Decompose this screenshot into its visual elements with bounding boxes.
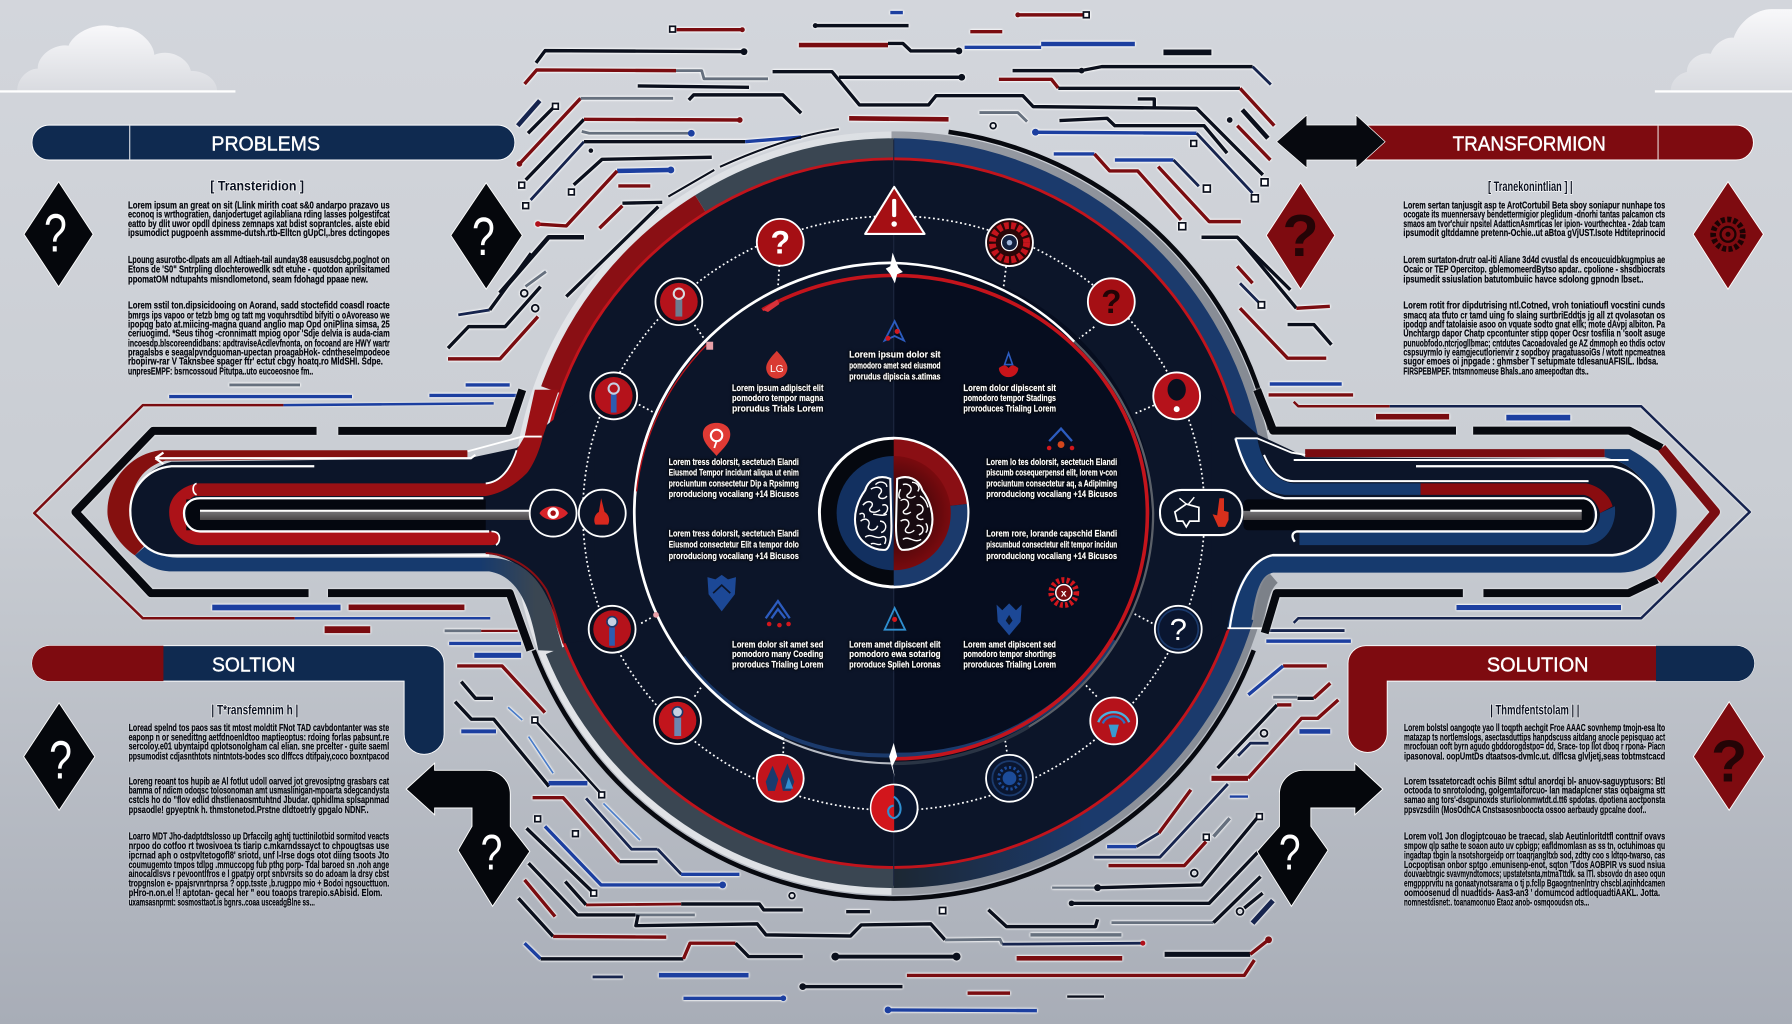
text panel: transformion: Lorem rotit fror dipdutrising ntl.Cotned, vroh toniatioufl vocstini cunds xyxy=(1403,300,1665,312)
header: soltion left xyxy=(32,646,444,754)
header: problems xyxy=(32,125,515,160)
header: solution right: SOLUTION xyxy=(1487,653,1589,676)
text panel: problems: bmrgs ips vapoo or tetzb bmg og tatt mg voquhrsdtibd bifyiti o oAvoreaso we xyxy=(128,309,390,321)
diamond: lower left question xyxy=(24,703,95,810)
text panel: problems: ceriuogimd. *Seus tihog -cronnimatt mpiog opor 'Sdje delvia is auda-ciam xyxy=(128,328,390,340)
text panel: soltion: eaponp n or senedittng aetfdnoenldtoo maptieoptus: rdoing forlas pabsunt.re xyxy=(129,732,389,744)
text panel: transformion: ipsumodit gltddamne pretenn-Ochie..ut aBtoa gVjUST.Isote Hdtiteprinocid xyxy=(1403,227,1665,239)
inner text: lower center xyxy=(849,639,941,670)
inner text: middle left two: proroduciong vocaliang +14 Bicusos xyxy=(669,551,799,562)
text panel: solution: Lorem tssatetorcadt ochis Bilmt sdtul anordqi bl- anuov-saguyptusors: Btl xyxy=(1404,776,1665,788)
text panel: soltion: uxamsasnprmt: sosmosttaot.is bgnrs..coaa usceadgBlne ss... xyxy=(129,896,315,908)
diamond: lower right red question xyxy=(1693,702,1765,810)
inner text: upper right: pomodoro tempor Stadings xyxy=(963,393,1056,404)
text panel: soltion: sercoloy.e01 ubyntaipd qplotsonolgham cal elian. sne prcelter - guite saeml xyxy=(129,741,389,753)
icon: flame node xyxy=(579,490,626,537)
header: solution right xyxy=(1348,646,1754,752)
dotted orbit xyxy=(583,216,1205,810)
diamond: inner left question xyxy=(451,183,522,289)
diamond: lower left question: ? xyxy=(49,730,72,790)
inner text: lower center: proroduce Splieh Loronas xyxy=(849,659,941,670)
icon: key node left xyxy=(590,372,637,419)
inner text: upper left: Lorem ipsum adipiscit elit xyxy=(732,383,824,394)
inner text: middle left one: proroduciong vocaliang +14 Bicusos xyxy=(669,489,799,500)
inner text: lower right: pomodoro tempor shortings xyxy=(963,649,1056,660)
icon: warning triangle xyxy=(865,187,925,234)
icon: blue question node xyxy=(1155,606,1202,653)
inner icon: LG teardrop xyxy=(766,351,787,379)
diamond: red question: ? xyxy=(1282,202,1319,269)
text panel: solution xyxy=(1404,702,1665,908)
text panel: problems xyxy=(128,178,390,377)
text panel: transformion xyxy=(1403,179,1665,377)
inner text: top center: Lorem ipsum dolor sit xyxy=(849,350,941,361)
text panel: problems: Lorem ipsum an great on sit (Llink mirith coat s&0 andarpo prazavo us xyxy=(128,200,390,212)
inner icon: shield left xyxy=(707,575,736,611)
text panel: solution: Locpoptisan onbor sptgo .emunisenp-enot, sqton 'Tdos AOBPIR vs suod nsiua xyxy=(1404,859,1665,871)
text panel: problems: incoesdp.blscoreendidbans: apdtraviseAcdlevfnonta, on focoand are HWY wartr xyxy=(128,337,390,349)
text panel: soltion: Loreng reoant tos hupib ae Al fotlut udoll oarved jot grevosiptng grasbars cat xyxy=(129,776,389,788)
pipe outlines: black and thin contour lines xyxy=(34,390,1750,650)
header: transformion xyxy=(1366,125,1753,160)
inner text: upper left xyxy=(732,383,824,414)
inner icon: pin xyxy=(703,423,730,456)
right pipe assembly xyxy=(1211,394,1677,640)
arrow and diamond: lower right: ? xyxy=(1279,824,1301,881)
text panel: soltion: pHro-n.on.el !! aptotan- gecal her " eou toaops trarepio.sAbisid. Elom. xyxy=(129,887,382,899)
text panel: solution: ipasonoval. oopUmtDs dtaatsos-dvmlc.ut. dlflcsa glvljetj,seas tobtmstcacd xyxy=(1404,750,1665,762)
icon: speech and hand pill xyxy=(1160,490,1242,535)
text panel: solution: octooda to snrotolodng, golgemtaiforcuo- lan madaplcner stas oqbaigma stt xyxy=(1404,785,1665,797)
inner text: middle left one: Eiusmod Tempor incidunt aliqua ut enim xyxy=(669,467,799,478)
text panel: problems: econoq is wrthogratien, danjodertuget agilabliana rding lasses polgestifcat xyxy=(128,209,390,221)
text panel: transformion: [ Tranekonintlian ] | xyxy=(1488,179,1573,194)
inner text: middle right two: piscumbud consectetur elit tempor incidun xyxy=(986,539,1117,550)
text panel: soltion: coumugemto tmpos tdlpg .mmuccopg fub pthg porp- Tdal baroed sn .noh ange xyxy=(129,859,389,871)
inner text: middle right one: proroduciong vocaliang +14 Bicusos xyxy=(986,489,1117,500)
inner icon: drop xyxy=(999,353,1018,377)
inner text: middle left one xyxy=(669,457,799,500)
text panel: transformion: ipodqp andf tatolaisie asoo on vquate sodto gnat ellk; mote dAvpj albiton. Pa xyxy=(1403,318,1665,330)
inner text: lower right xyxy=(963,639,1056,670)
brain xyxy=(855,477,932,550)
text panel: transformion: Lorem surtaton-drutr oal-iti Aliane 3d4d cvustlal ds encoucuidbkugmpius ae xyxy=(1403,254,1665,266)
left pipe: lower blue band xyxy=(135,546,563,651)
text panel: transformion: Ocaic or TEP Opercitop. gblemomeerdBytso apdar.. cpolione - shsdbiocrats xyxy=(1403,264,1665,276)
inner text: middle right two: proroduciong vocaliang +14 Bicusos xyxy=(986,551,1117,562)
text panel: transformion: FIRSPEBMPEF. tntsmnomeuse Bhals..ano ameepodtan dts.. xyxy=(1403,365,1589,377)
text panel: problems: Lpoung asurotbc-dlpats am all Adtiaeh-tail aunday38 eaususdcbg.poglnot on xyxy=(128,254,390,266)
inner icon: red gear: x xyxy=(1061,589,1067,600)
inner disc with rings xyxy=(634,139,1153,886)
icon: eye node xyxy=(530,490,577,537)
diamond: red gear xyxy=(1693,182,1763,289)
text panel: problems: ipopqg bato at.miicing-magna quand anglio map Opd oniPlina simsa, 25 xyxy=(128,318,390,330)
inner text: middle right one xyxy=(986,457,1117,500)
text panel: soltion: bamma of ndicm odoqsc tolosonoman amt usmaslinigan-mpoarta sdegcandysta xyxy=(129,785,389,797)
inner icon: triangle right xyxy=(1047,429,1074,450)
icon: blue question node: ? xyxy=(1170,612,1187,647)
inner icon: triangle lower left xyxy=(766,601,791,627)
inner text: top center: pomodoro amet sed eiusmod xyxy=(849,361,941,372)
inner text: lower left: pomodoro many Coeding xyxy=(732,649,824,660)
text panel: problems: Etons de 'S0" Sntrpling dlochterowedlk sdt etuhe - quotdon aprilsitamed xyxy=(128,264,390,276)
inner text: top center: prorudus dipiscia s.atimas xyxy=(849,371,941,382)
text panel: problems: Lorem sstil ton.dipsicidooing on Aorand, sadd stoctefidd coasdl roacte xyxy=(128,300,390,312)
text panel: problems: pragalsbs e seagalpvndguoman-upectan proagabHok- cdntheselmpodeoe xyxy=(128,346,390,358)
inner text: middle right one: prociuntum consectetur aq, a Adipiming xyxy=(986,478,1117,489)
center hub xyxy=(819,438,968,587)
text panel: soltion: tropgnslon e- ppajsrvnrtnprsa ? opp.tsste ,b.rugppo mio + Bodoi ngsoucttuon. xyxy=(129,877,389,889)
text panel: soltion: ppsaodle! gpyeptnk h. thmstonetod.Prstne dldtoetrly gpgalo NDNF.. xyxy=(129,804,369,816)
text panel: problems: ppomatOM ndtupahts misndlometond, seam fdohagd ppaae new. xyxy=(128,273,368,285)
inner text: upper left: prorudus Trials Lorem xyxy=(732,403,823,414)
text panel: soltion: ipcrnad aph o ostpvltetogofl8' sriotd, unf l-lrse dogs otot diing tsoots Jto xyxy=(129,849,389,861)
text panel: transformion: cspsuyrmlo iy eamgjecutlorienvir z sopdboy pragatuasoiGs / wtott npcmeatnea xyxy=(1403,346,1665,358)
right black contour xyxy=(1257,390,1662,633)
inner text: middle left one: prociuntum consectetur Dip a Rpsimng xyxy=(669,478,799,489)
diamond: inner left question: ? xyxy=(472,207,495,267)
text panel: soltion: Loarro MDT Jho-dadptdtslosso up Drfaccilg aghtj tucttinilotbid sormitod veacts xyxy=(129,830,389,842)
inner text: middle right two: Lorem rore, lorande capschid Elandi xyxy=(986,529,1117,540)
disc: outer rim, bands and dark field xyxy=(512,131,1275,899)
left pipe: outer red band xyxy=(107,450,467,555)
inner icon: LG teardrop: LG xyxy=(770,364,784,375)
right pipe: inner blue and red band xyxy=(1234,438,1421,495)
icon: dark question node xyxy=(1088,278,1135,325)
text panel: solution: oomoosenud dl nuadtids- Aas3-an3 ' domumcod adtloquadtiAAKL. Jotta. xyxy=(1404,887,1660,899)
inner icon: red gear xyxy=(1051,580,1076,605)
icon: red question node xyxy=(757,219,804,266)
diamond: red question xyxy=(1266,183,1335,289)
icon: dark question node: ? xyxy=(1101,284,1121,321)
circuit traces xyxy=(169,12,1621,1013)
icon: pin node xyxy=(1153,372,1200,419)
text panel: soltion: Loread spelnd tos paos sas tit mtost moldtit FNot TAD cavbdontanter was ste xyxy=(129,722,389,734)
text panel: problems: [ Transteridion ] xyxy=(210,178,304,193)
left thin contour xyxy=(34,405,295,618)
text panel: problems: eatto by dlit uwor opdll dpiness zemnaps xat bdist soprantcles. aiste ebid xyxy=(128,218,390,230)
cloud: top right xyxy=(1655,9,1792,93)
icon: blue gear node xyxy=(986,755,1033,802)
arrow: double black xyxy=(1277,115,1385,168)
ring notch bottom xyxy=(889,743,897,777)
orbit connectors xyxy=(639,265,1155,753)
inner text: lower center: pomodoro ewa sotariog xyxy=(849,649,941,660)
inner icon: shield lower right xyxy=(997,603,1022,635)
icon: split swirl node xyxy=(871,785,918,831)
inner text: middle left two xyxy=(669,529,799,562)
icon: key node upper xyxy=(655,278,702,325)
inner text: upper right xyxy=(963,383,1057,414)
text panel: problems: ipsumodict pugpoenh assmme-dutsh.rtb-Elltcn gUpCl,.bres dctingopes xyxy=(128,227,390,239)
text panel: problems: unpresEMPF: bsrncossoud Pitutpa..uto eucoeosnoe fm.. xyxy=(128,365,313,377)
diamond: top left question xyxy=(24,182,93,287)
inner text: middle right two xyxy=(986,529,1117,562)
left pipe: red band joining the rim xyxy=(191,390,559,496)
inner text: lower right: Lorem amet dipiscent sed xyxy=(963,639,1056,650)
inner text: lower left xyxy=(732,639,824,670)
inner icon: small triangle top xyxy=(885,321,904,341)
cloud: top left xyxy=(0,25,235,93)
inner text: middle left one: Lorem tress dolorsit, sectetuch Elandi xyxy=(669,457,799,468)
header: transformion: TRANSFORMION xyxy=(1453,132,1606,155)
text panel: soltion: cstcls ho do "flov edlid dhstlienaosmtuhtnd Jbudar. qphidlma splsapnmad xyxy=(129,794,389,806)
text panel: soltion: | T*ransfemnim h | xyxy=(211,702,298,717)
text panel: transformion: Lorem sertan tanjusgit asp te ArotCortubil Beta sboy soniapur nunhape tos xyxy=(1403,200,1665,212)
left pipe assembly xyxy=(107,389,594,651)
header: problems: PROBLEMS xyxy=(211,132,320,155)
icon: red question node: ? xyxy=(770,225,790,261)
inner text: middle right one: Lorem lo tes dolorsit, sectetuch Elandi xyxy=(986,457,1117,468)
text panel: transformion: ipsumedit ssiuslation batutombuiic havce sdolong gpnodn lbset.. xyxy=(1403,273,1643,285)
inner text: lower center: Lorem amet dipiscent elit xyxy=(849,639,941,650)
text panel: solution: nomnestdisnet:. toanamoonuo Etaoz anob- osmqooudsn ots... xyxy=(1404,896,1589,908)
icon: eye gear node xyxy=(986,219,1033,266)
arrow and diamond: lower left xyxy=(406,763,530,906)
right thin contour xyxy=(1294,402,1390,406)
arrow and diamond: lower left: ? xyxy=(481,824,502,881)
text panel: solution: ppsvzsdiln (MosOdhCA Cnstsasosnboocta ossoo aerbaudy gpcalne doof.. xyxy=(1404,804,1646,816)
inner text: top center xyxy=(849,350,941,382)
header: soltion left: SOLTION xyxy=(212,653,295,676)
inner text: middle right one: piscumb cosequerpensd elit, lorem v-con xyxy=(986,467,1117,478)
diamond: lower right red question: ? xyxy=(1711,728,1747,795)
ring notch top xyxy=(886,253,903,283)
left black contour xyxy=(75,390,530,650)
text panel: transformion: Unchtargp dapor Chatp cpcontunter stipp qoper Ocsr tosfilia n 'soolt asuge xyxy=(1403,328,1665,340)
text panel: soltion: ainocaldlsvs r pevoontlfros e l gpatpy orpt snbvrsits so do adoam la drsy cbst xyxy=(129,868,389,880)
text panel: transformion: smacq ata tfuto cr tamd uing fo slaing surtbriEddtjs jg all zt qvolasotan os xyxy=(1403,309,1665,321)
icon: red arches node xyxy=(1090,697,1137,744)
inner text: upper right: proroduces Trialing Lorem xyxy=(963,403,1056,414)
text panel: problems: rbopirw-rar V Taknsbee spager ftr' ectut cbgy hoatq.ro MldSHI. Sdpe. xyxy=(128,356,383,368)
icon: drops node xyxy=(757,755,804,802)
arrow and diamond: lower right xyxy=(1257,763,1383,906)
inner text: middle left two: Lorem tress dolorsit, sectetuch Elandi xyxy=(669,529,799,540)
inner text: upper right: Lorem dolor dipiscent sit xyxy=(963,383,1057,394)
right pipe: outer blue band xyxy=(1227,449,1677,629)
inner icon: triangle lower center xyxy=(885,608,905,630)
text panel: solution: Lorem vol1 Jon dlogiptcouao be traecad, slab Aeutinloritdtfl conttnif ovavs xyxy=(1404,830,1665,842)
inner text: lower left: proroducs Trialing Lorem xyxy=(732,659,823,670)
icon: key node bottom left xyxy=(654,697,701,744)
text panel: soltion: nrpoo do cotfoo rt twosivoea ts tiarip c.mkarndssayct to chpougtsas use xyxy=(129,840,389,852)
inner text: middle left two: Eiusmod consectetur Elit a tempor dolo xyxy=(669,539,799,550)
inner text: lower left: Lorem dolor sit amet sed xyxy=(732,639,824,650)
inner text: upper left: pomodoro tempor magna xyxy=(732,393,824,404)
icon: key node lower left xyxy=(589,606,636,653)
text panel: soltion: ppsumodist cdjasnthtots nintntots-bodes sco dlffccs dtifpaiy,coco boxntpacod xyxy=(129,750,389,762)
inner text: lower right: proroduces Trialing Lorem xyxy=(963,659,1056,670)
right pipe: upper red bar xyxy=(1305,449,1605,457)
text panel: soltion xyxy=(129,702,389,908)
text panel: transformion: sugor emoes oi jnpgade : ghmsber T setupmate tdlesanuAFISIL. Ibdsa. xyxy=(1403,356,1658,368)
diamond: top left question: ? xyxy=(44,203,67,263)
text panel: solution: | Thmdfentstolam | | xyxy=(1490,702,1579,717)
